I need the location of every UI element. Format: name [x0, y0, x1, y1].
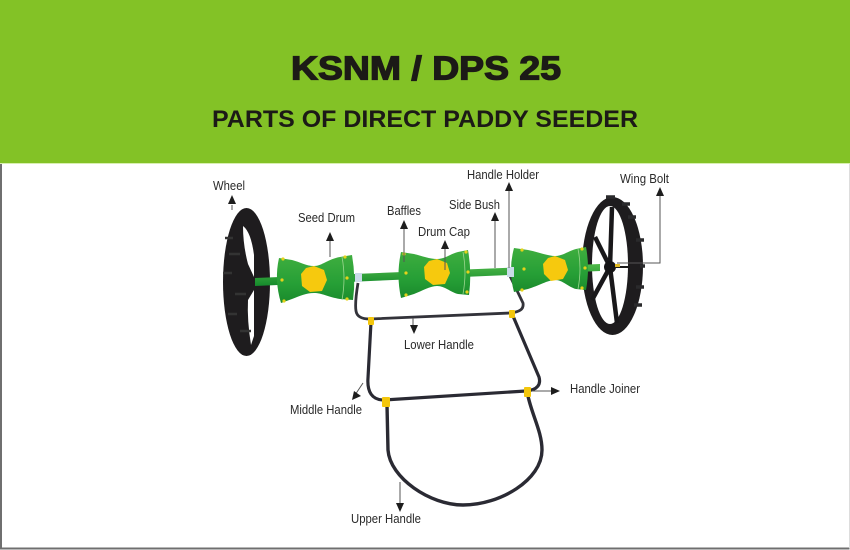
- drum cap: [301, 266, 327, 292]
- seed drum center: [398, 250, 470, 298]
- part labels: Seed Drum: [298, 211, 355, 225]
- seed drum left: [277, 255, 354, 303]
- side bush pieces: [355, 273, 362, 282]
- lower handle: [356, 276, 523, 319]
- part labels: Wing Bolt: [620, 172, 669, 186]
- right wheel: [582, 197, 645, 335]
- part labels: Upper Handle: [351, 512, 421, 526]
- upper handle: [387, 396, 542, 505]
- page border: [1, 164, 850, 548]
- callout arrows: [232, 190, 660, 504]
- part labels: Wheel: [213, 179, 245, 193]
- arrow heads: [228, 182, 664, 512]
- header band: [0, 0, 850, 164]
- axle: [255, 264, 600, 286]
- part labels: Middle Handle: [290, 403, 362, 417]
- part labels: Side Bush: [449, 198, 500, 212]
- handle joiners: [368, 310, 531, 407]
- part labels: Drum Cap: [418, 225, 470, 239]
- part labels: Handle Joiner: [570, 382, 640, 396]
- middle handle: [368, 316, 540, 400]
- part labels: [213, 168, 669, 526]
- subtitle: PARTS OF DIRECT PADDY SEEDER: [212, 106, 638, 133]
- seed drum right: [511, 247, 588, 292]
- part labels: Baffles: [387, 204, 421, 218]
- part labels: Handle Holder: [467, 168, 539, 182]
- seeder machine: [223, 197, 645, 505]
- title: KSNM / DPS 25: [291, 50, 561, 86]
- part labels: Lower Handle: [404, 338, 474, 352]
- left wheel: [223, 208, 270, 356]
- wing bolt: [616, 266, 630, 268]
